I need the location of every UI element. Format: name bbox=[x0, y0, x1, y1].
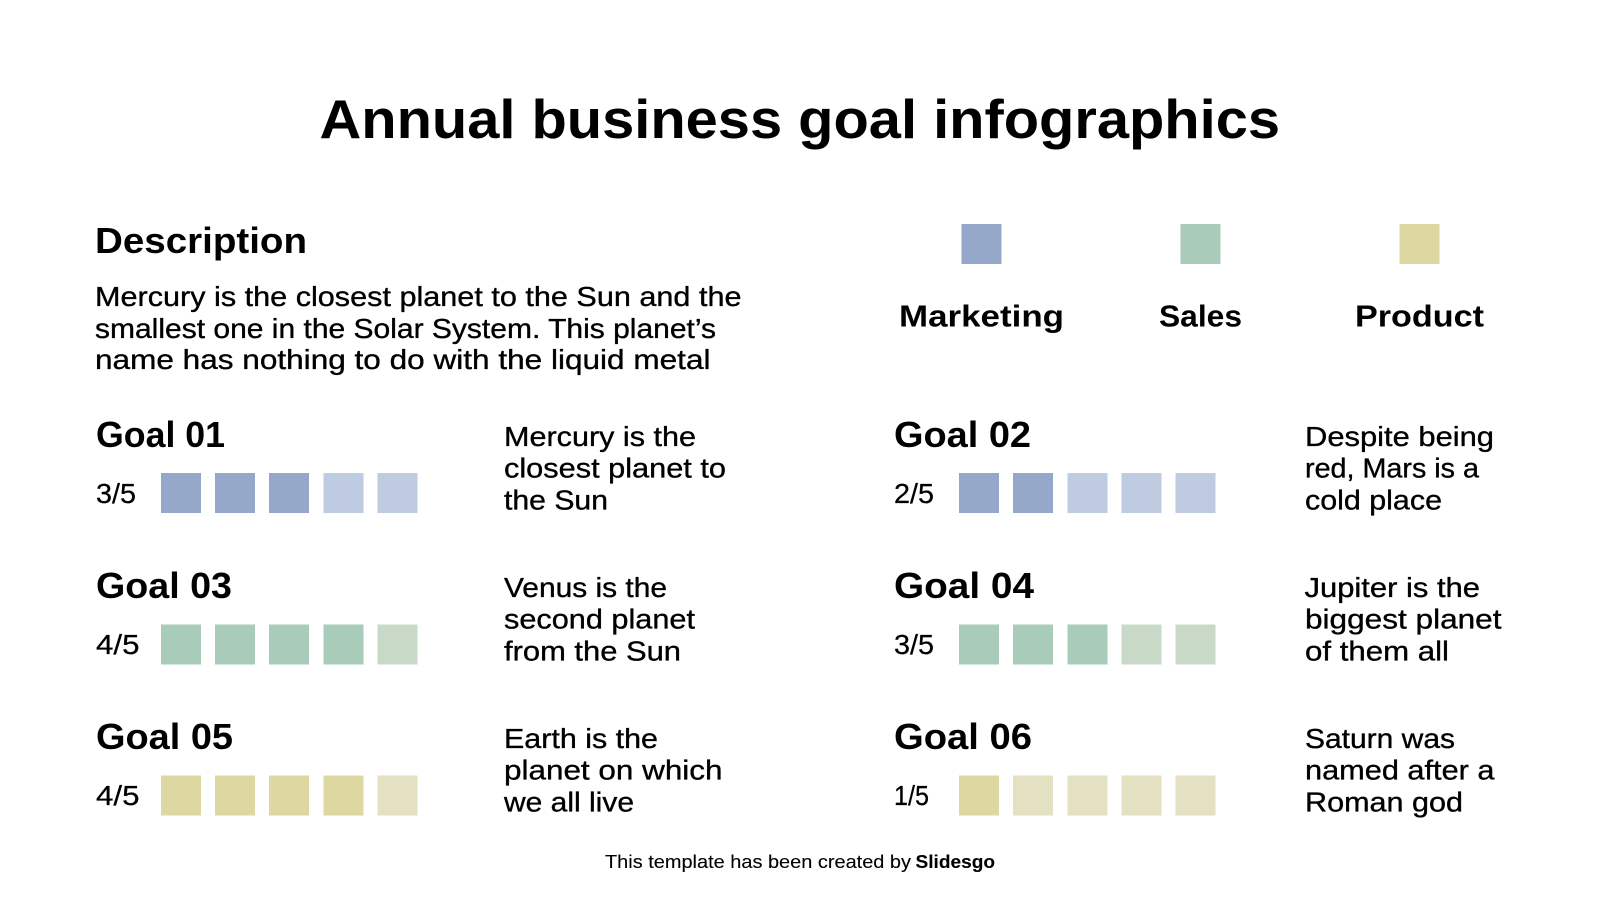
goal 06: 1/5 bbox=[894, 780, 929, 811]
legend: product bbox=[1355, 224, 1484, 334]
goal 05: Earth is the bbox=[504, 723, 658, 754]
goal 03: 4/5 bbox=[96, 629, 140, 660]
goal 06: named after a bbox=[1305, 755, 1495, 786]
goal 05: planet on which bbox=[504, 755, 722, 786]
goal 02: cold place bbox=[1305, 484, 1442, 516]
goal 01 bbox=[96, 414, 726, 516]
goal 04: of them all bbox=[1305, 636, 1449, 666]
goal 05: Goal 05 bbox=[96, 716, 233, 757]
goal 03: second planet bbox=[504, 604, 695, 635]
goal 05 bbox=[96, 716, 722, 818]
footer credit: Slidesgo bbox=[916, 852, 995, 872]
goal 01: the Sun bbox=[504, 484, 608, 516]
goal 02: Despite being bbox=[1305, 421, 1494, 452]
goal 06: Roman god bbox=[1305, 786, 1463, 818]
goal 01: closest planet to bbox=[504, 453, 726, 484]
legend: marketing: Marketing bbox=[899, 298, 1064, 334]
goal 03: Goal 03 bbox=[96, 565, 232, 606]
goal 03: from the Sun bbox=[504, 636, 681, 666]
goal 03: Venus is the bbox=[504, 572, 667, 603]
goal 04: Jupiter is the bbox=[1304, 572, 1480, 603]
goal 01: Goal 01 bbox=[96, 414, 225, 455]
legend: sales: Sales bbox=[1159, 298, 1242, 334]
goal 02: 2/5 bbox=[894, 478, 934, 509]
heading: description: Description bbox=[95, 220, 307, 261]
goal 03 bbox=[96, 565, 695, 666]
text block: description bbox=[95, 281, 742, 375]
legend: marketing bbox=[899, 224, 1064, 334]
goal 06: Saturn was bbox=[1305, 723, 1455, 754]
text block: description: name has nothing to do with the liquid metal bbox=[95, 344, 710, 375]
goal 05: 4/5 bbox=[96, 780, 140, 811]
goal 02: red, Mars is a bbox=[1305, 453, 1480, 484]
goal 02: Goal 02 bbox=[894, 414, 1031, 455]
legend: sales bbox=[1159, 224, 1242, 334]
text block: description: Mercury is the closest planet to the Sun and the bbox=[95, 281, 742, 312]
goal 01: Mercury is the bbox=[504, 421, 696, 452]
goal 02 bbox=[894, 414, 1494, 516]
goal 06 bbox=[894, 716, 1495, 818]
goal 04: 3/5 bbox=[894, 629, 934, 660]
goal 04 bbox=[894, 565, 1502, 666]
goal 04: Goal 04 bbox=[894, 565, 1034, 606]
footer credit: This template has been created by bbox=[605, 852, 911, 872]
goal 06: Goal 06 bbox=[894, 716, 1032, 757]
goal 01: 3/5 bbox=[96, 478, 136, 509]
text block: description: smallest one in the Solar System. This planet’s bbox=[95, 313, 716, 344]
goal 04: biggest planet bbox=[1305, 604, 1502, 635]
goal 05: we all live bbox=[503, 786, 634, 818]
legend: product: Product bbox=[1355, 298, 1484, 334]
title: Annual business goal infographics bbox=[320, 88, 1280, 150]
